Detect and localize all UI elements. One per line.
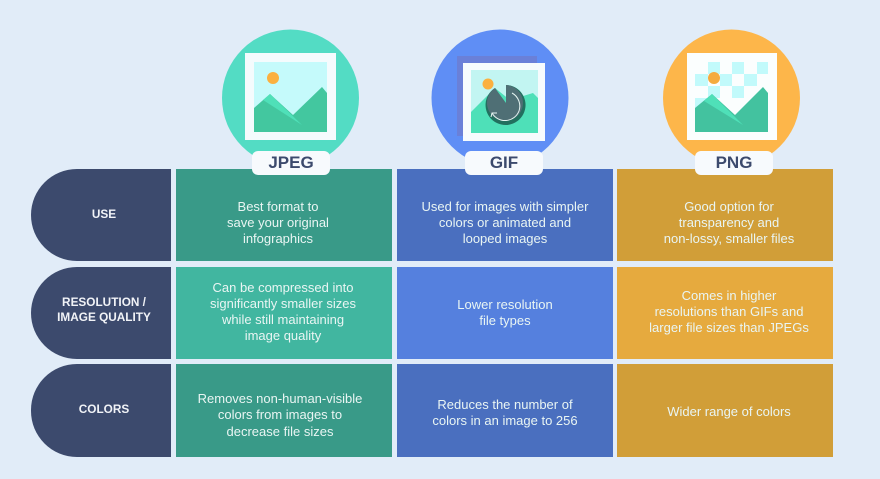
GIF colors xyxy=(397,364,613,457)
GIF resolution xyxy=(397,267,613,359)
row heading: use: USE xyxy=(92,206,116,220)
GIF use xyxy=(397,169,613,261)
icon: GIF image with replay badge in blue circle xyxy=(432,30,568,157)
icon: PNG image with transparency checks in orange circle xyxy=(663,30,800,156)
JPEG use: save your original xyxy=(227,215,329,230)
label: JPEG xyxy=(252,151,330,175)
PNG colors xyxy=(617,364,833,457)
GIF use: looped images xyxy=(463,231,547,246)
GIF resolution: Lower resolution xyxy=(457,297,553,312)
label: GIF: GIF xyxy=(490,153,518,172)
PNG use: transparency and xyxy=(679,215,779,230)
JPEG use xyxy=(176,169,392,261)
PNG use xyxy=(617,169,833,261)
row heading: use xyxy=(31,169,171,261)
JPEG resolution: significantly smaller sizes xyxy=(210,296,356,311)
JPEG colors xyxy=(176,364,392,457)
row heading: colors: COLORS xyxy=(79,402,129,416)
JPEG resolution: image quality xyxy=(245,328,321,343)
PNG resolution: larger file sizes than JPEGs xyxy=(649,320,809,335)
GIF use: colors or animated and xyxy=(439,215,571,230)
row heading: resolution / image quality: RESOLUTION / xyxy=(62,295,146,309)
PNG resolution: Comes in higher xyxy=(682,288,776,303)
PNG use: non-lossy, smaller files xyxy=(664,231,794,246)
JPEG colors: decrease file sizes xyxy=(227,424,333,439)
JPEG use: infographics xyxy=(243,231,313,246)
row heading: resolution / image quality xyxy=(31,267,171,359)
row heading: resolution / image quality: IMAGE QUALITY xyxy=(57,310,151,324)
PNG use: Good option for xyxy=(684,199,774,214)
label: PNG: PNG xyxy=(716,153,752,172)
JPEG resolution: Can be compressed into xyxy=(213,280,353,295)
label: PNG xyxy=(695,151,773,175)
GIF colors: colors in an image to 256 xyxy=(432,413,578,428)
label: JPEG: JPEG xyxy=(268,153,314,172)
JPEG colors: Removes non-human-visible xyxy=(198,391,362,406)
row heading: colors xyxy=(31,364,171,457)
JPEG resolution xyxy=(176,267,392,359)
JPEG use: Best format to xyxy=(238,199,318,214)
label: GIF xyxy=(465,151,543,175)
icon: JPEG image in teal circle xyxy=(222,30,359,155)
GIF use: Used for images with simpler xyxy=(422,199,588,214)
PNG resolution: resolutions than GIFs and xyxy=(655,304,803,319)
GIF colors: Reduces the number of xyxy=(437,397,573,412)
GIF resolution: file types xyxy=(479,313,531,328)
PNG colors: Wider range of colors xyxy=(667,404,791,419)
PNG resolution xyxy=(617,267,833,359)
JPEG colors: colors from images to xyxy=(218,407,342,422)
JPEG resolution: while still maintaining xyxy=(222,312,344,327)
